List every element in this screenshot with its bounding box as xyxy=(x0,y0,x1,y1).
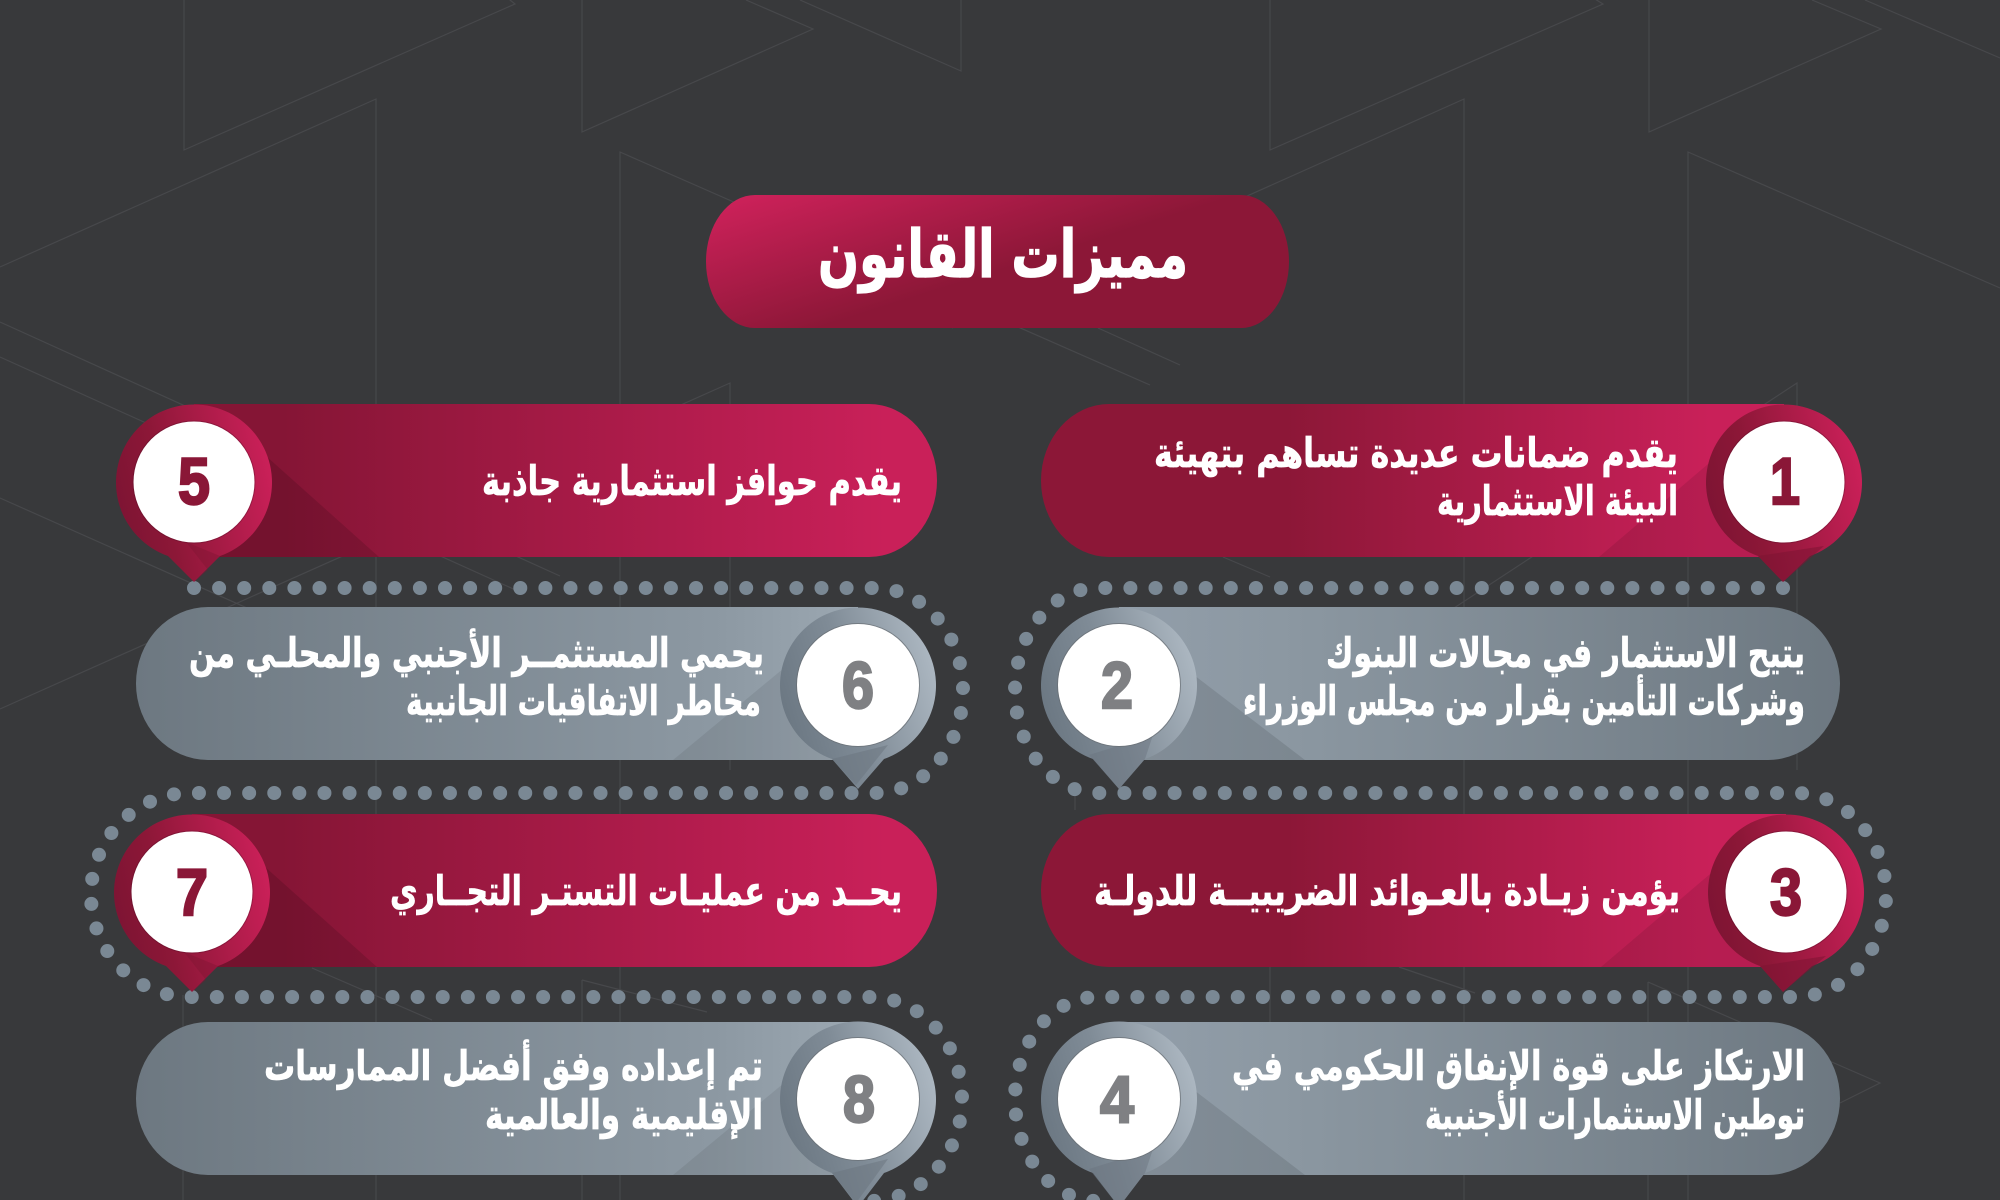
shadow xyxy=(673,1078,858,1175)
shadow xyxy=(1601,857,1786,967)
pin: 7 xyxy=(176,855,208,929)
pin: 6 xyxy=(842,648,874,722)
text: يقدم ضمانات عديدة تساهم بتهيئة xyxy=(1154,429,1678,478)
panel 3 xyxy=(1041,814,1864,992)
text: البيئة الاستثمارية xyxy=(1437,477,1678,525)
panel 8 xyxy=(136,1021,936,1200)
pin xyxy=(1041,607,1197,789)
pin: 3 xyxy=(1770,855,1802,929)
pin: 5 xyxy=(178,444,210,518)
pin: 1 xyxy=(1770,444,1800,518)
text xyxy=(264,1039,763,1140)
panel 2 xyxy=(1041,607,1840,789)
text: يؤمن زيـادة بالعـوائد الضريبيــة للدولـة xyxy=(1094,867,1680,916)
text: تم إعداده وفق أفضل الممارسات xyxy=(264,1039,763,1091)
pin xyxy=(780,607,936,789)
pin: 2 xyxy=(1101,648,1133,722)
dotted connector: left column xyxy=(91,588,963,1200)
bar xyxy=(136,1022,858,1175)
text: يحمي المستثمــر الأجنبي والمحلـي من xyxy=(189,627,764,678)
pin xyxy=(1708,814,1864,992)
pin: 4 xyxy=(1100,1062,1134,1136)
shadow xyxy=(1120,672,1305,760)
text xyxy=(1232,1042,1805,1139)
shadow xyxy=(673,663,858,760)
bar xyxy=(192,814,937,967)
text: يقدم حوافز استثمارية جاذبة xyxy=(482,457,902,506)
bar xyxy=(136,607,858,760)
text xyxy=(1243,629,1805,726)
shadow xyxy=(192,857,377,967)
bar xyxy=(1119,1022,1840,1175)
panel 7 xyxy=(114,814,937,992)
title pill xyxy=(706,195,1289,328)
pill shape xyxy=(706,195,1289,328)
text xyxy=(1154,429,1678,525)
dotted connector: right column xyxy=(1015,588,1886,1200)
panel 5 xyxy=(116,404,937,582)
pin xyxy=(114,814,270,992)
pin xyxy=(1706,404,1862,582)
shadow xyxy=(1599,447,1784,557)
bar xyxy=(194,404,937,557)
pin: 8 xyxy=(843,1062,875,1136)
shadow xyxy=(1120,1087,1305,1175)
bar xyxy=(1041,814,1786,967)
text: الإقليمية والعالمية xyxy=(485,1091,763,1140)
pin xyxy=(1041,1021,1197,1200)
pin xyxy=(780,1021,936,1200)
title text: مميزات القانون xyxy=(818,216,1188,294)
text: الارتكاز على قوة الإنفاق الحكومي في xyxy=(1232,1042,1805,1090)
text: مخاطر الاتفاقيات الجانبية xyxy=(406,677,761,725)
shadow xyxy=(194,447,379,557)
panel 1 xyxy=(1041,404,1862,582)
bar xyxy=(1041,404,1784,557)
bar xyxy=(1119,607,1840,760)
text: توطين الاستثمارات الأجنبية xyxy=(1425,1089,1805,1139)
text: يتيح الاستثمار في مجالات البنوك xyxy=(1326,629,1805,677)
panel 4 xyxy=(1041,1021,1840,1200)
text: يحــد من عمليـات التستـر التجــاري xyxy=(390,867,902,915)
pin xyxy=(116,404,272,582)
text xyxy=(189,627,764,725)
panel 6 xyxy=(136,607,936,789)
